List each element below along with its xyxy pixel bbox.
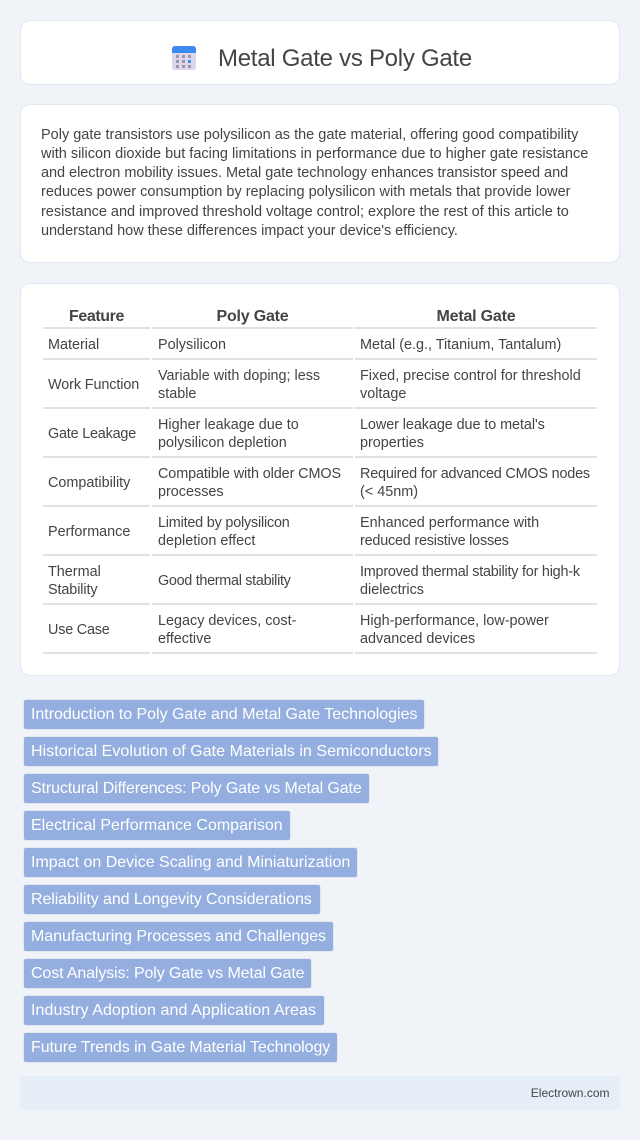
link: reliability xyxy=(23,884,321,915)
row: material: Metal (e.g., Titanium, Tantalum) xyxy=(360,337,561,353)
link: cost analysis xyxy=(23,958,312,989)
row: thermal stability xyxy=(48,564,580,598)
comparison table card xyxy=(20,283,620,676)
intro text: understand how these differences impact your device's efficiency. xyxy=(41,223,458,239)
row: use case: Use Case xyxy=(48,622,110,638)
row: thermal stability: Stability xyxy=(48,582,98,598)
row: material: Material xyxy=(48,337,99,353)
row: work function xyxy=(48,368,581,402)
row: use case: Legacy devices, cost- xyxy=(158,613,296,629)
row: performance: Enhanced performance with xyxy=(360,515,539,531)
intro text xyxy=(41,127,588,239)
row: work function: voltage xyxy=(360,386,406,402)
row: gate leakage: properties xyxy=(360,435,424,451)
link: electrical performance: Electrical Performance Comparison xyxy=(31,817,283,834)
link: industry adoption: Industry Adoption and Application Areas xyxy=(31,1002,316,1019)
link: future trends: Future Trends in Gate Material Technology xyxy=(31,1039,330,1056)
row: compatibility: Compatible with older CMOS xyxy=(158,466,341,482)
row: thermal stability: dielectrics xyxy=(360,582,424,598)
link: introduction: Introduction to Poly Gate and Metal Gate Technologies xyxy=(31,706,417,723)
row: thermal stability: Thermal xyxy=(48,564,101,580)
intro text: Poly gate transistors use polysilicon as the gate material, offering good compatibility xyxy=(41,127,578,143)
icon: calendar xyxy=(172,46,196,70)
row: work function: Fixed, precise control for threshold xyxy=(360,368,581,384)
row: material xyxy=(48,337,561,353)
link: electrical performance xyxy=(23,810,291,841)
intro text: and electron mobility issues. Metal gate technology enhances transistor speed and xyxy=(41,165,568,181)
link: device scaling: Impact on Device Scaling and Miniaturization xyxy=(31,854,350,871)
intro text: resistance and improved threshold voltage control; explore the rest of this article to xyxy=(41,204,569,220)
row: gate leakage: polysilicon depletion xyxy=(158,435,287,451)
row: compatibility: processes xyxy=(158,484,224,500)
row: use case: advanced devices xyxy=(360,631,475,647)
link: introduction xyxy=(23,699,425,730)
row: work function: Work Function xyxy=(48,377,139,393)
link: structural differences: Structural Differences: Poly Gate vs Metal Gate xyxy=(31,780,362,797)
title: Metal Gate vs Poly Gate xyxy=(218,45,472,72)
row: work function: Variable with doping; less xyxy=(158,368,320,384)
table header: Metal Gate xyxy=(437,308,515,325)
comparison table xyxy=(43,308,597,654)
row: gate leakage: Gate Leakage xyxy=(48,426,136,442)
row: compatibility: (< 45nm) xyxy=(360,484,418,500)
link: industry adoption xyxy=(23,995,325,1026)
row: performance xyxy=(48,515,539,549)
link: device scaling xyxy=(23,847,358,878)
row: thermal stability: Good thermal stability xyxy=(158,573,291,589)
intro text: reduces power consumption by replacing polysilicon with metals that provide lower xyxy=(41,184,571,200)
link: manufacturing xyxy=(23,921,334,952)
row: compatibility xyxy=(48,466,590,500)
table header: Poly Gate xyxy=(216,308,288,325)
intro card xyxy=(20,104,620,263)
row: use case: High-performance, low-power xyxy=(360,613,549,629)
link: historical evolution xyxy=(23,736,439,767)
row: performance: Limited by polysilicon xyxy=(158,515,290,531)
row: performance: reduced resistive losses xyxy=(360,533,509,549)
table header: Feature xyxy=(69,308,124,325)
row: use case xyxy=(48,613,549,647)
link: historical evolution: Historical Evolution of Gate Materials in Semiconductors xyxy=(31,743,432,760)
link: manufacturing: Manufacturing Processes and Challenges xyxy=(31,928,326,945)
footer credit: Electrown.com xyxy=(531,1086,610,1100)
row: thermal stability: Improved thermal stability for high-k xyxy=(360,564,580,580)
link: cost analysis: Cost Analysis: Poly Gate vs Metal Gate xyxy=(31,965,304,982)
row: material: Polysilicon xyxy=(158,337,226,353)
row: gate leakage: Higher leakage due to xyxy=(158,417,299,433)
row: compatibility: Required for advanced CMOS nodes xyxy=(360,466,590,482)
row: gate leakage: Lower leakage due to metal's xyxy=(360,417,545,433)
row: compatibility: Compatibility xyxy=(48,475,130,491)
row: use case: effective xyxy=(158,631,211,647)
row: gate leakage xyxy=(48,417,545,451)
row: performance: Performance xyxy=(48,524,130,540)
link: structural differences xyxy=(23,773,370,804)
row: performance: depletion effect xyxy=(158,533,255,549)
link: future trends xyxy=(23,1032,338,1063)
topic links list xyxy=(23,699,439,1063)
link: reliability: Reliability and Longevity Considerations xyxy=(31,891,312,908)
row: work function: stable xyxy=(158,386,196,402)
intro text: with silicon dioxide but facing limitations in performance due to higher gate resistance xyxy=(41,146,588,162)
footer xyxy=(20,1076,620,1110)
header card xyxy=(20,20,620,85)
table header xyxy=(69,308,516,325)
